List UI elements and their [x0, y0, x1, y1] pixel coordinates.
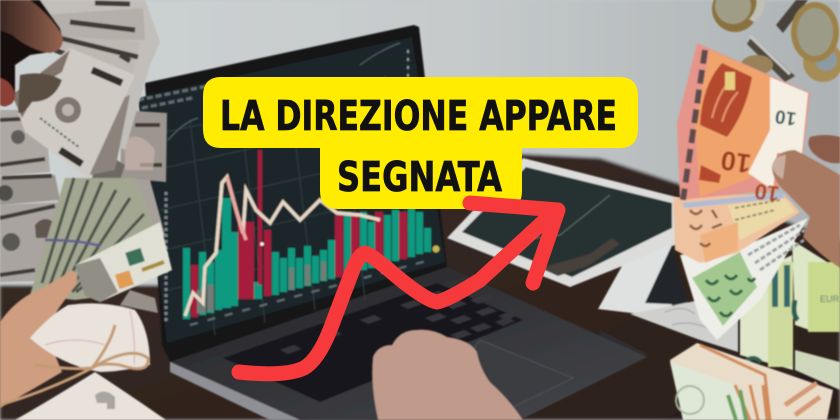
papers on the desk: [447, 158, 738, 377]
top dollar fan: [12, 0, 160, 178]
hand on keyboard: [372, 330, 523, 420]
euro stack: [670, 343, 833, 420]
coins: [712, 0, 840, 82]
title line 2: SEGNATA: [337, 153, 502, 201]
teal volume bars: [183, 198, 431, 319]
grey volume bars: [197, 262, 326, 313]
orange euro note: [673, 193, 800, 263]
laptop: [138, 25, 647, 420]
red ten euro note: 10: [774, 105, 798, 129]
lower hand: [0, 270, 77, 408]
red volume bars: [191, 150, 407, 317]
laptop lid: [145, 25, 447, 362]
title line 1: LA DIREZIONE APPARE: [220, 92, 617, 140]
rolled euro notes: [740, 240, 840, 390]
title banner: [203, 77, 638, 209]
money bag: [0, 303, 166, 420]
candle line: [185, 177, 380, 316]
chart screen: [138, 37, 445, 343]
top hand: [0, 0, 63, 106]
right money group: [670, 0, 840, 420]
red rising arrow: [239, 203, 558, 374]
green euro note: [680, 218, 808, 340]
right hand: [772, 135, 840, 268]
red ten euro note: [677, 43, 810, 207]
red ten euro note: 10: [719, 145, 753, 179]
rolled euro notes: EUR: [820, 294, 840, 304]
background dollar bills: [0, 110, 167, 313]
front bill: [12, 48, 135, 178]
red ten euro note: 10: [753, 179, 781, 207]
left money group: [0, 0, 172, 420]
laptop base and keyboard: [170, 267, 647, 420]
lower dollar fan: [30, 178, 172, 302]
